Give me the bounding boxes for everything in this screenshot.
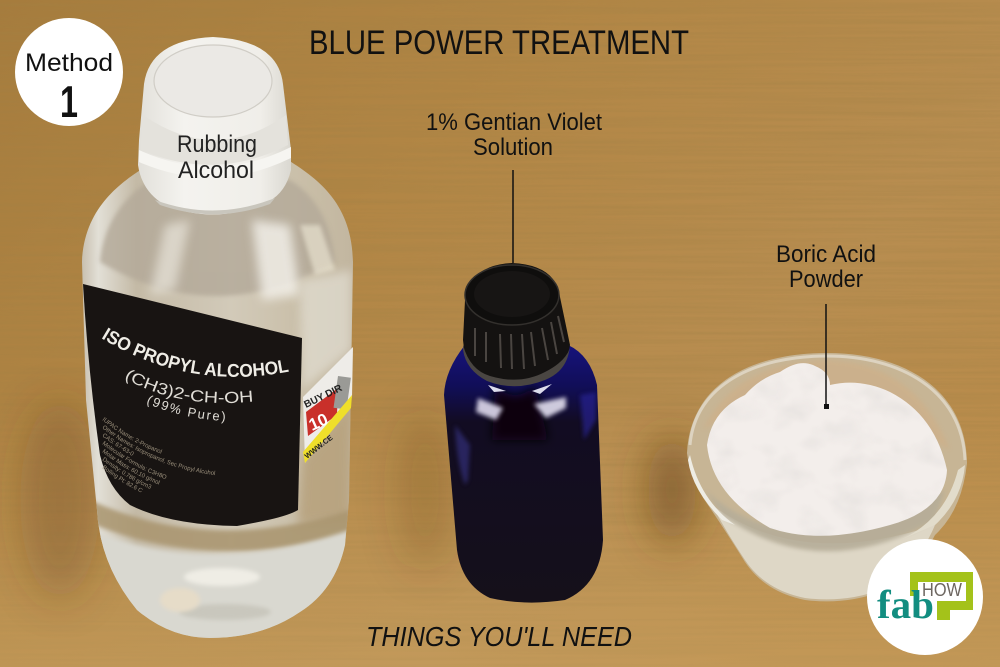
footer caption: THINGS YOU'LL NEED <box>366 621 632 652</box>
label: boric acid <box>776 241 876 293</box>
label: boric acid: Boric Acid <box>776 241 876 268</box>
label title: ISO PROPYL ALCOHOL <box>102 328 289 377</box>
bowl base <box>712 505 935 599</box>
pointer: gentian violet <box>512 170 514 263</box>
bottle body <box>82 160 353 638</box>
blue bottle ribbed cap <box>463 263 570 386</box>
sticker <box>302 347 353 463</box>
label: gentian violet: 1% Gentian Violet <box>426 109 602 136</box>
label: gentian violet: Solution <box>473 134 553 161</box>
sticker: BUY DIR <box>302 383 345 411</box>
shadows under objects <box>20 400 696 600</box>
dark blue bottle: gentian violet <box>444 263 603 603</box>
label small print: Density: 0.786 g/cm3 <box>102 457 152 489</box>
label small print: Boiling Pt: 82.6 C <box>102 465 142 492</box>
white cap <box>138 37 291 215</box>
label small print: Molar Mass: 60.10 g/mol <box>102 449 160 484</box>
blue bottle highlights <box>455 384 596 485</box>
label: rubbing alcohol: Alcohol <box>178 157 254 184</box>
glass reflections <box>82 180 352 640</box>
label small print: IUPAC Name: 2-Propanol <box>102 417 162 454</box>
bowl lower rim <box>705 490 945 551</box>
title: BLUE POWER TREATMENT <box>309 24 689 62</box>
label purity: (99% Pure) <box>147 396 225 424</box>
logo bracket <box>910 572 973 620</box>
black label <box>83 284 302 526</box>
label: rubbing alcohol <box>177 131 257 184</box>
bowl outer glass <box>687 353 967 601</box>
label: gentian violet <box>426 109 602 161</box>
pointer: boric acid <box>824 304 829 409</box>
label: rubbing alcohol: Rubbing <box>177 131 257 158</box>
label: boric acid: Powder <box>789 266 863 293</box>
logo how: HOW <box>922 580 962 600</box>
fabhow logo <box>867 539 983 655</box>
sticker: WWW.CE <box>303 433 334 461</box>
label small print: Molecular Formula: C3H8O <box>102 441 166 479</box>
method badge <box>15 18 123 127</box>
blue bottle body <box>444 345 603 603</box>
logo fab: fab <box>877 582 934 627</box>
method number: 1 <box>60 78 78 127</box>
label small print <box>102 417 216 492</box>
label small print: Other Names: Isopropanol, Sec Propyl Alcohol <box>103 426 216 476</box>
powder <box>707 363 947 536</box>
sticker: 10 <box>306 410 331 435</box>
glass bowl with boric acid <box>687 353 967 601</box>
label small print: CAS: 67-63-0 <box>103 434 134 456</box>
label formula: (CH3)2-CH-OH <box>126 370 252 404</box>
bowl inner top <box>703 360 950 450</box>
bottle: rubbing alcohol <box>82 37 353 638</box>
method label: Method <box>25 49 113 77</box>
